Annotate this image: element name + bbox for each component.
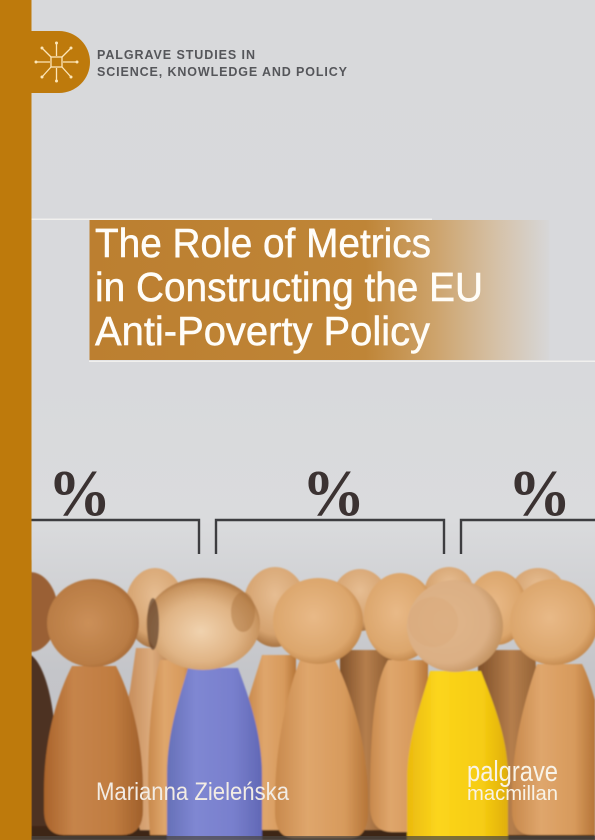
title banner	[90, 220, 550, 360]
far-left cut-off figure	[0, 560, 58, 840]
title: in Constructing the EU	[95, 264, 483, 310]
publisher logo: macmillan	[467, 783, 558, 805]
orange spine band	[0, 0, 32, 840]
title: The Role of Metrics	[95, 220, 431, 266]
figure: wood body left	[44, 579, 143, 835]
series name: SCIENCE, KNOWLEDGE AND POLICY	[97, 65, 348, 79]
percent signs: %	[508, 457, 571, 530]
figure: wood body centre	[273, 578, 368, 838]
top and bottom white rules of the title banner	[31, 218, 595, 362]
figure: wood body centre-right	[364, 573, 436, 832]
percent signs: %	[48, 457, 111, 530]
bottom dark edge	[31, 836, 595, 840]
series name: PALGRAVE STUDIES IN	[97, 48, 255, 62]
percent signs: %	[302, 457, 365, 530]
figure: blue peg	[146, 578, 262, 840]
figure: wood body right	[510, 579, 595, 835]
series tab	[31, 31, 90, 93]
percent brackets	[31, 520, 595, 554]
shadow behind the figures	[31, 712, 595, 840]
figure: yellow peg	[407, 580, 508, 840]
icon: series logo	[34, 42, 78, 82]
title	[95, 220, 483, 354]
title: Anti-Poverty Policy	[95, 308, 430, 354]
author: Marianna Zieleńska	[96, 778, 289, 806]
wooden figures	[0, 560, 595, 840]
back row figures	[125, 567, 565, 835]
percent signs	[48, 457, 571, 530]
publisher logo	[467, 756, 558, 805]
series name	[97, 48, 348, 79]
publisher logo: palgrave	[467, 756, 558, 788]
